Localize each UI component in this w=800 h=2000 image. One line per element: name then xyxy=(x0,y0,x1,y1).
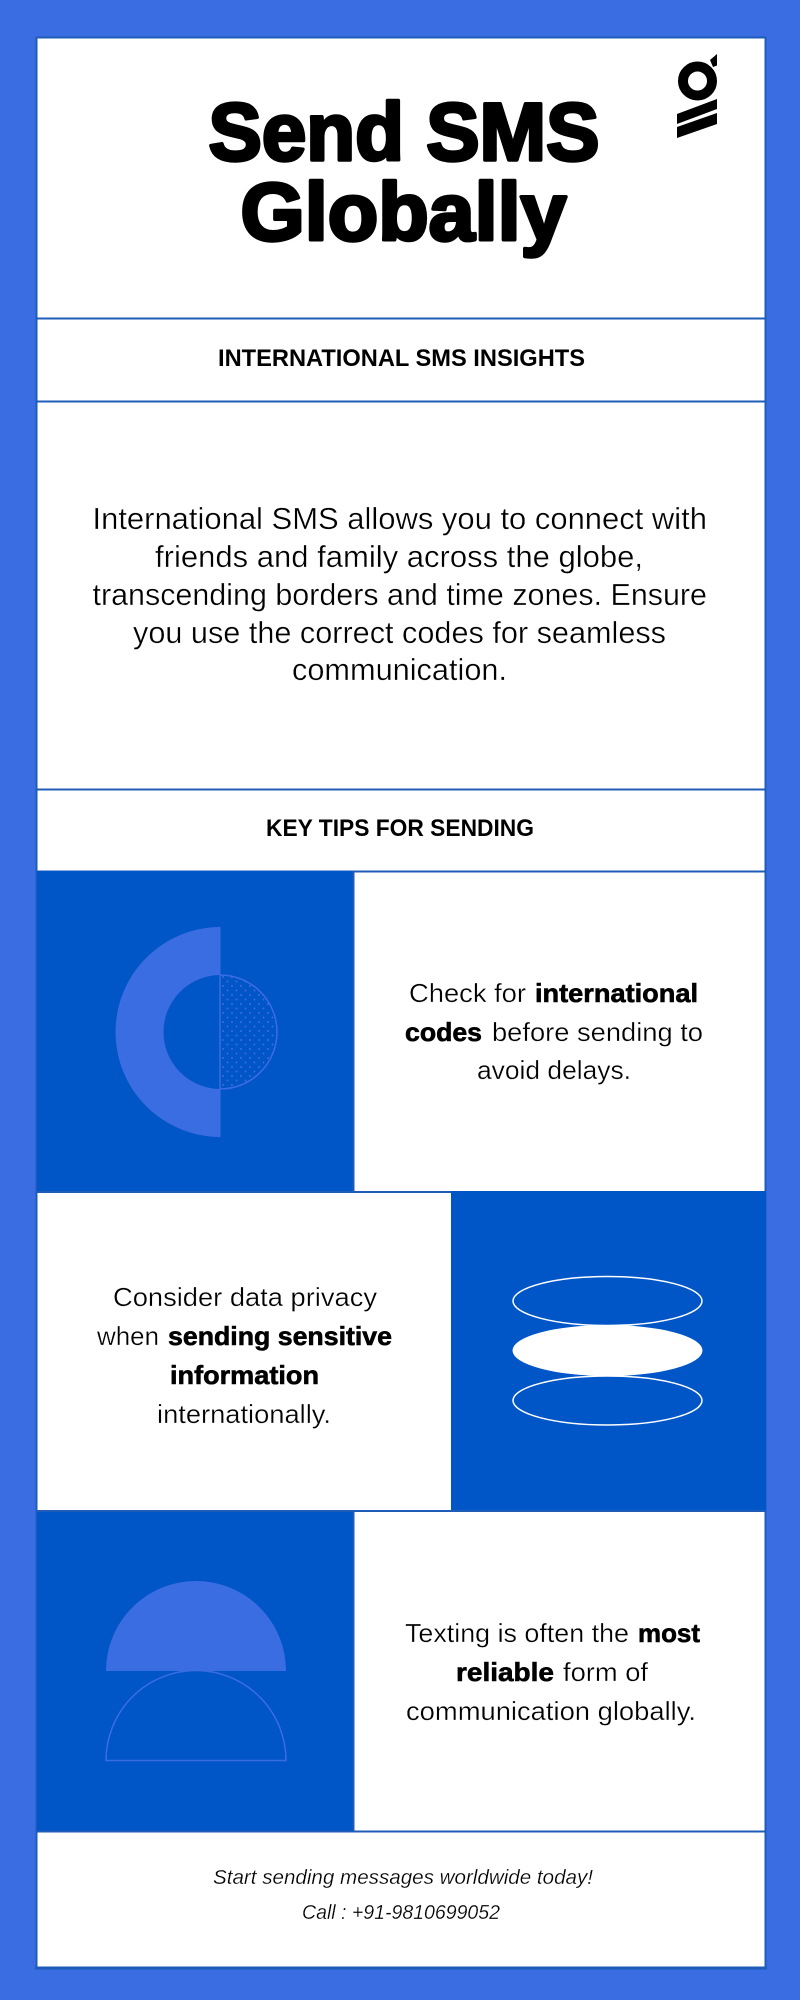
text block: tip 2: when xyxy=(96,1321,159,1351)
text block: introduction: International SMS allows you to connect with xyxy=(92,501,707,536)
panel: tip 3 graphic xyxy=(37,1512,353,1831)
text block: introduction xyxy=(92,501,707,687)
heading: key tips for sending: KEY TIPS FOR SENDING xyxy=(266,815,534,842)
text block: tip 3: reliable xyxy=(456,1657,554,1687)
icon: logo mark xyxy=(677,54,717,138)
text block: tip 2: Consider data privacy xyxy=(113,1282,377,1312)
title: Send SMS xyxy=(208,87,600,178)
text block: tip 3: communication globally. xyxy=(406,1696,696,1726)
text block: introduction: communication. xyxy=(292,652,507,687)
text block: tip 3: form of xyxy=(563,1657,649,1687)
text block: tip 3: Texting is often the xyxy=(405,1618,629,1648)
text block: tip 2: sending sensitive xyxy=(168,1321,392,1351)
footer: call to action: Start sending messages worldwide today! xyxy=(213,1867,593,1889)
text block: tip 1: codes xyxy=(405,1017,482,1047)
text block: tip 1: avoid delays. xyxy=(477,1055,631,1085)
text block: introduction: transcending borders and time zones. Ensure xyxy=(92,577,707,612)
icon: filled and outlined half circles xyxy=(106,1581,286,1760)
text block: tip 1 xyxy=(405,978,703,1085)
panel: tip 1 graphic xyxy=(37,871,353,1192)
heading: international sms insights: INTERNATIONAL SMS INSIGHTS xyxy=(218,345,585,372)
title: Globally xyxy=(240,167,567,258)
text block: tip 1: before sending to xyxy=(492,1017,703,1047)
text block: tip 2: information xyxy=(170,1360,319,1390)
text block: tip 2 xyxy=(96,1282,392,1429)
panel: title block xyxy=(208,54,717,258)
text block: tip 1: Check for xyxy=(409,978,526,1008)
text block: tip 3: most xyxy=(638,1618,700,1648)
panel: tip 2 graphic xyxy=(451,1191,766,1510)
icon: three stacked ellipses xyxy=(512,1276,702,1425)
title xyxy=(208,87,600,258)
text block: introduction: friends and family across the globe, xyxy=(155,539,643,574)
icon: half ring and dotted half circle xyxy=(116,927,277,1137)
footer: call to action: Call : +91-9810699052 xyxy=(302,1902,500,1924)
footer: call to action xyxy=(213,1867,593,1924)
text block: introduction: you use the correct codes for seamless xyxy=(133,615,666,650)
text block: tip 3 xyxy=(405,1618,700,1726)
text block: tip 2: internationally. xyxy=(157,1399,331,1429)
text block: tip 1: international xyxy=(535,978,698,1008)
